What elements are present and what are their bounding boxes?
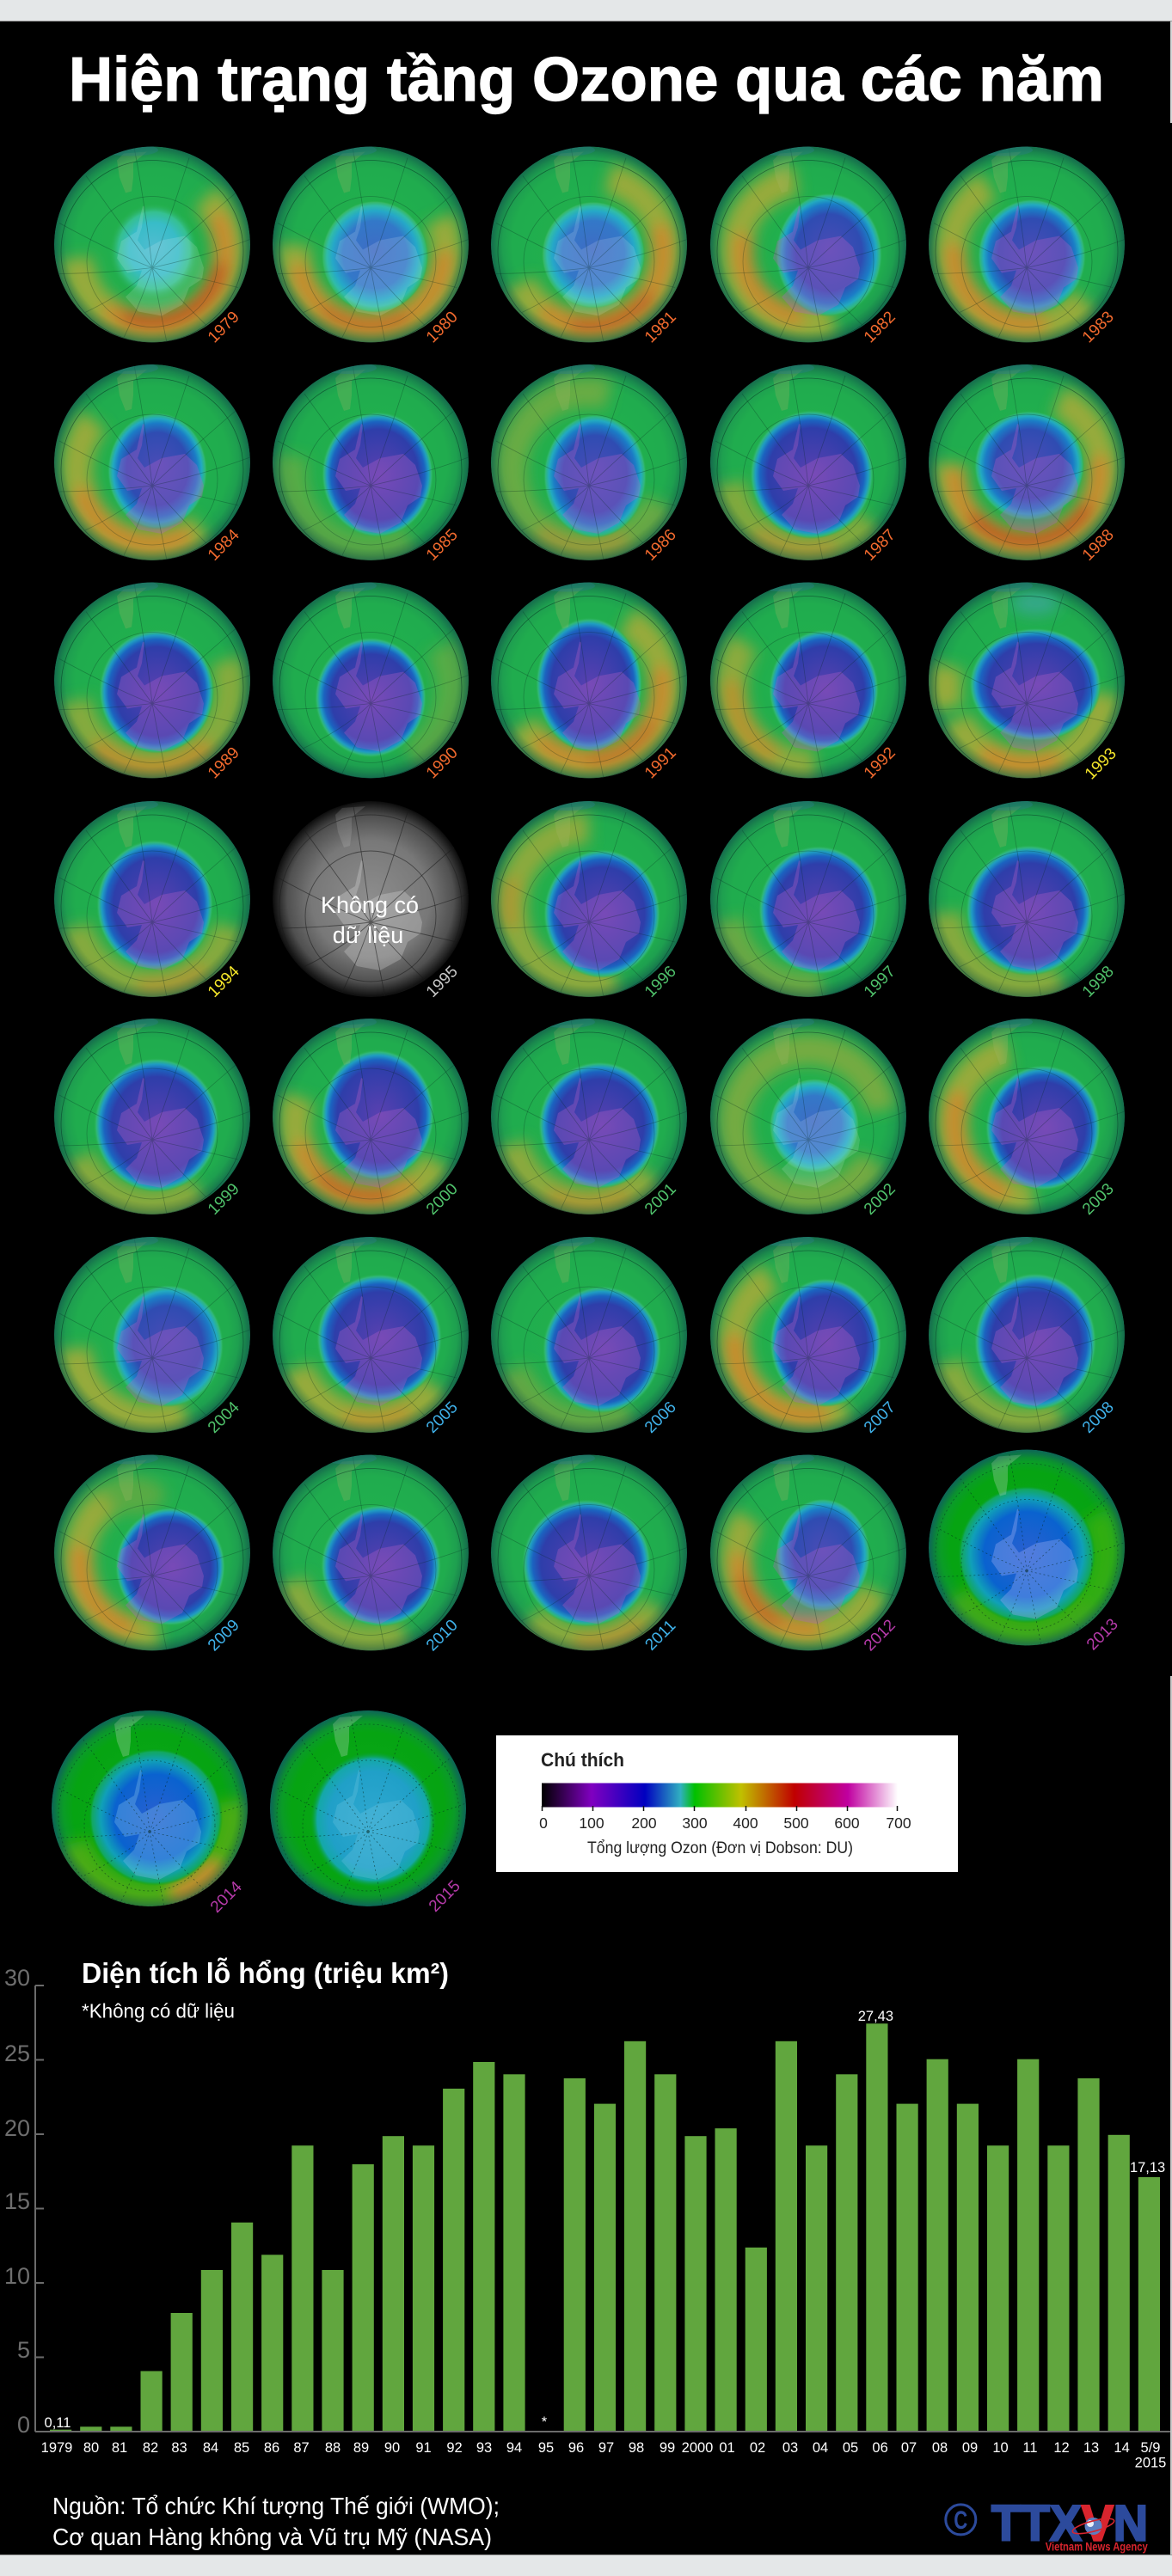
legend unit caption: Tổng lượng Ozon (Đơn vị Dobson: DU): [587, 1839, 853, 1857]
globe: 2002: [708, 1016, 909, 1224]
globe: 2009: 2009: [205, 1616, 243, 1655]
chart note: *Không có dữ liệu: [82, 1999, 235, 2022]
x axis labels: 11: [1022, 2440, 1038, 2456]
globe: 2003: 2003: [1079, 1180, 1118, 1219]
y axis: 10: [4, 2263, 30, 2289]
globe: 1993: 1993: [1082, 744, 1120, 783]
globe: 2000: [267, 1016, 474, 1227]
globe: 1984: [54, 364, 250, 560]
globe: 1988: 1988: [1079, 526, 1118, 565]
x axis labels: 97: [598, 2440, 614, 2456]
globe: 1981: [491, 146, 687, 343]
no data note: [321, 892, 419, 948]
globe: 2003: [929, 1016, 1125, 1219]
x axis labels: 96: [568, 2440, 584, 2456]
x axis labels: 13: [1083, 2440, 1099, 2456]
x axis labels: 92: [446, 2440, 463, 2456]
globe: 2005: 2005: [423, 1398, 462, 1437]
x axis labels: 94: [506, 2440, 522, 2456]
x axis labels: 10: [992, 2440, 1009, 2456]
globe: 2007: [708, 1234, 909, 1442]
colour scale: 600: [834, 1814, 860, 1832]
globe: 1979: 1979: [205, 308, 243, 346]
colour scale: 500: [783, 1814, 809, 1832]
x axis labels: 01: [719, 2440, 735, 2456]
globe: 2005: [262, 1233, 479, 1450]
globe: 2008: 2008: [1079, 1398, 1118, 1437]
globe: 1979: [54, 146, 250, 343]
globe: 1990: [273, 583, 469, 779]
legend panel: [496, 1735, 958, 1872]
colour scale: 700: [886, 1814, 911, 1832]
x axis labels: 2015: [1135, 2455, 1166, 2470]
globe: 1985: 1985: [423, 526, 462, 565]
y axis: 5: [17, 2337, 30, 2363]
globe: 1986: 1986: [641, 526, 680, 565]
globe: 1989: 1989: [205, 743, 243, 782]
source: Nguồn: Tổ chức Khí tượng Thế giới (WMO);: [52, 2493, 500, 2519]
x axis labels: 04: [813, 2440, 828, 2456]
x axis labels: 14: [1114, 2440, 1130, 2456]
globe: 1990: 1990: [423, 743, 462, 782]
x axis labels: 06: [872, 2440, 888, 2456]
globe: 2009: [54, 1453, 250, 1655]
x axis labels: 87: [293, 2440, 310, 2456]
globe: 1980: 1980: [423, 308, 462, 346]
colour scale: 100: [579, 1814, 604, 1832]
globe: 1993: [929, 583, 1125, 780]
globe: 2013: 2013: [1083, 1615, 1122, 1654]
x axis labels: 80: [83, 2440, 99, 2456]
globe: 1999: 1999: [205, 1180, 243, 1219]
globe: 2006: [479, 1232, 699, 1452]
data labels: *: [542, 2414, 548, 2430]
globe: 2001: 2001: [641, 1180, 680, 1219]
y axis: 25: [4, 2041, 30, 2066]
x axis labels: 02: [750, 2440, 765, 2456]
globe: 1985: [273, 364, 469, 560]
globe: 2015: [270, 1710, 466, 1916]
globe: 2015: 2015: [426, 1877, 464, 1916]
logo: TTXVN: TTXVN: [991, 2496, 1148, 2552]
x axis labels: 86: [264, 2440, 279, 2456]
globe: 2002: 2002: [861, 1180, 899, 1219]
globe: 1982: 1982: [861, 308, 899, 346]
x axis labels: 90: [384, 2440, 400, 2456]
icon: copyright: C: [954, 2506, 967, 2535]
globe: 1984: 1984: [205, 526, 243, 565]
x axis labels: 85: [234, 2440, 249, 2456]
globe: 2011: [473, 1443, 705, 1676]
globe: 2012: 2012: [861, 1616, 899, 1655]
globe: 1980: [270, 144, 471, 352]
globe: 1987: [710, 364, 906, 560]
x axis labels: 88: [325, 2440, 341, 2456]
x axis labels: 12: [1053, 2440, 1070, 2456]
globe: 1994: [54, 801, 250, 997]
x axis labels: 98: [629, 2440, 644, 2456]
y axis: [4, 1965, 44, 2438]
x axis labels: 05: [843, 2440, 858, 2456]
globe: 2000: 2000: [423, 1180, 462, 1219]
globe: 2012: [710, 1453, 906, 1655]
y axis: 0: [17, 2412, 30, 2438]
x axis labels: 93: [476, 2440, 492, 2456]
x axis labels: 89: [353, 2440, 369, 2456]
data labels: 27,43: [858, 2009, 893, 2024]
globe: 1989: [54, 583, 250, 779]
x axis labels: 91: [415, 2440, 432, 2456]
legend title: Chú thích: [541, 1749, 624, 1771]
globe: 1983: 1983: [1079, 308, 1118, 346]
globe: 2010: 2010: [423, 1616, 462, 1655]
globe: 1994: 1994: [205, 963, 243, 1001]
globe: 1999: [40, 1011, 265, 1236]
bar chart: [50, 2023, 1160, 2432]
x axis labels: 82: [143, 2440, 158, 2456]
globe: 1982: [710, 144, 906, 346]
data labels: 0,11: [45, 2415, 71, 2431]
x axis labels: 2000: [682, 2440, 713, 2456]
logo: TTXVN: Vietnam News Agency: [1046, 2540, 1148, 2554]
x axis labels: 81: [112, 2440, 127, 2456]
globe: 2004: 2004: [205, 1398, 243, 1437]
globe: 1992: [708, 579, 909, 787]
bottom frame band: [0, 1676, 1172, 2576]
x axis labels: 99: [660, 2440, 675, 2456]
globe: 1987: 1987: [861, 526, 899, 565]
x axis labels: [41, 2440, 1166, 2470]
globe: 1997: 1997: [861, 963, 899, 1001]
x axis labels: 5/9: [1141, 2440, 1160, 2456]
globe: 2013: [917, 1446, 1136, 1663]
colour scale: 0: [539, 1814, 548, 1832]
chart title: Diện tích lỗ hổng (triệu km²): [82, 1957, 449, 1989]
globe: 1988: [926, 362, 1127, 570]
globe: 1995 (no data): [273, 801, 469, 1001]
globe: 1986: [491, 364, 687, 560]
y axis: 30: [4, 1965, 30, 1991]
top frame band: [0, 0, 1172, 123]
globe: 2006: 2006: [641, 1398, 680, 1437]
colour scale: 400: [733, 1814, 758, 1832]
globe: 2014: 2014: [207, 1878, 246, 1917]
globe: 2010: [263, 1453, 478, 1667]
globe: 2001: [477, 1012, 701, 1235]
x axis labels: 84: [203, 2440, 218, 2456]
source: [52, 2493, 500, 2550]
y axis: 15: [4, 2188, 30, 2214]
x axis labels: 07: [901, 2440, 917, 2456]
globe: 1981: 1981: [641, 308, 680, 346]
no data note: dữ liệu: [333, 922, 403, 948]
data labels: 17,13: [1130, 2160, 1165, 2175]
y axis: 20: [4, 2115, 30, 2141]
icon: logo globe: [1071, 2516, 1115, 2536]
globe: 1996: [490, 798, 688, 1005]
colour scale: 200: [631, 1814, 657, 1832]
x axis baseline: [35, 2431, 1170, 2432]
data labels: [45, 2009, 1165, 2431]
colour scale: 300: [682, 1814, 708, 1832]
source: Cơ quan Hàng không và Vũ trụ Mỹ (NASA): [52, 2524, 492, 2550]
globe: 1998: 1998: [1079, 963, 1118, 1001]
no data note: Không có: [321, 892, 419, 918]
globe: 2008: [919, 1234, 1134, 1449]
globe: 1991: 1991: [641, 743, 680, 782]
globe: 1996: 1996: [641, 963, 680, 1001]
globe: 1998: [919, 798, 1134, 1013]
x axis labels: 03: [782, 2440, 798, 2456]
globe: 2011: 2011: [641, 1617, 679, 1655]
colour scale: [539, 1783, 911, 1832]
globe: 1995 (no data): 1995: [423, 963, 462, 1001]
globe: 2007: 2007: [861, 1398, 899, 1437]
globe: 2004: [49, 1234, 255, 1445]
globe: 1997: [710, 798, 906, 1001]
globe: 2014: [34, 1700, 265, 1930]
globe: 1992: 1992: [861, 743, 899, 782]
icon: copyright: [946, 2505, 976, 2535]
x axis labels: 1979: [41, 2440, 72, 2456]
x axis labels: 83: [171, 2440, 187, 2456]
title: Hiện trạng tầng Ozone qua các năm: [69, 46, 1104, 114]
globe: 1983: [929, 146, 1125, 343]
x axis labels: 09: [962, 2440, 978, 2456]
x axis labels: 95: [538, 2440, 554, 2456]
globe: 1991: [491, 583, 687, 779]
x axis labels: 08: [932, 2440, 948, 2456]
